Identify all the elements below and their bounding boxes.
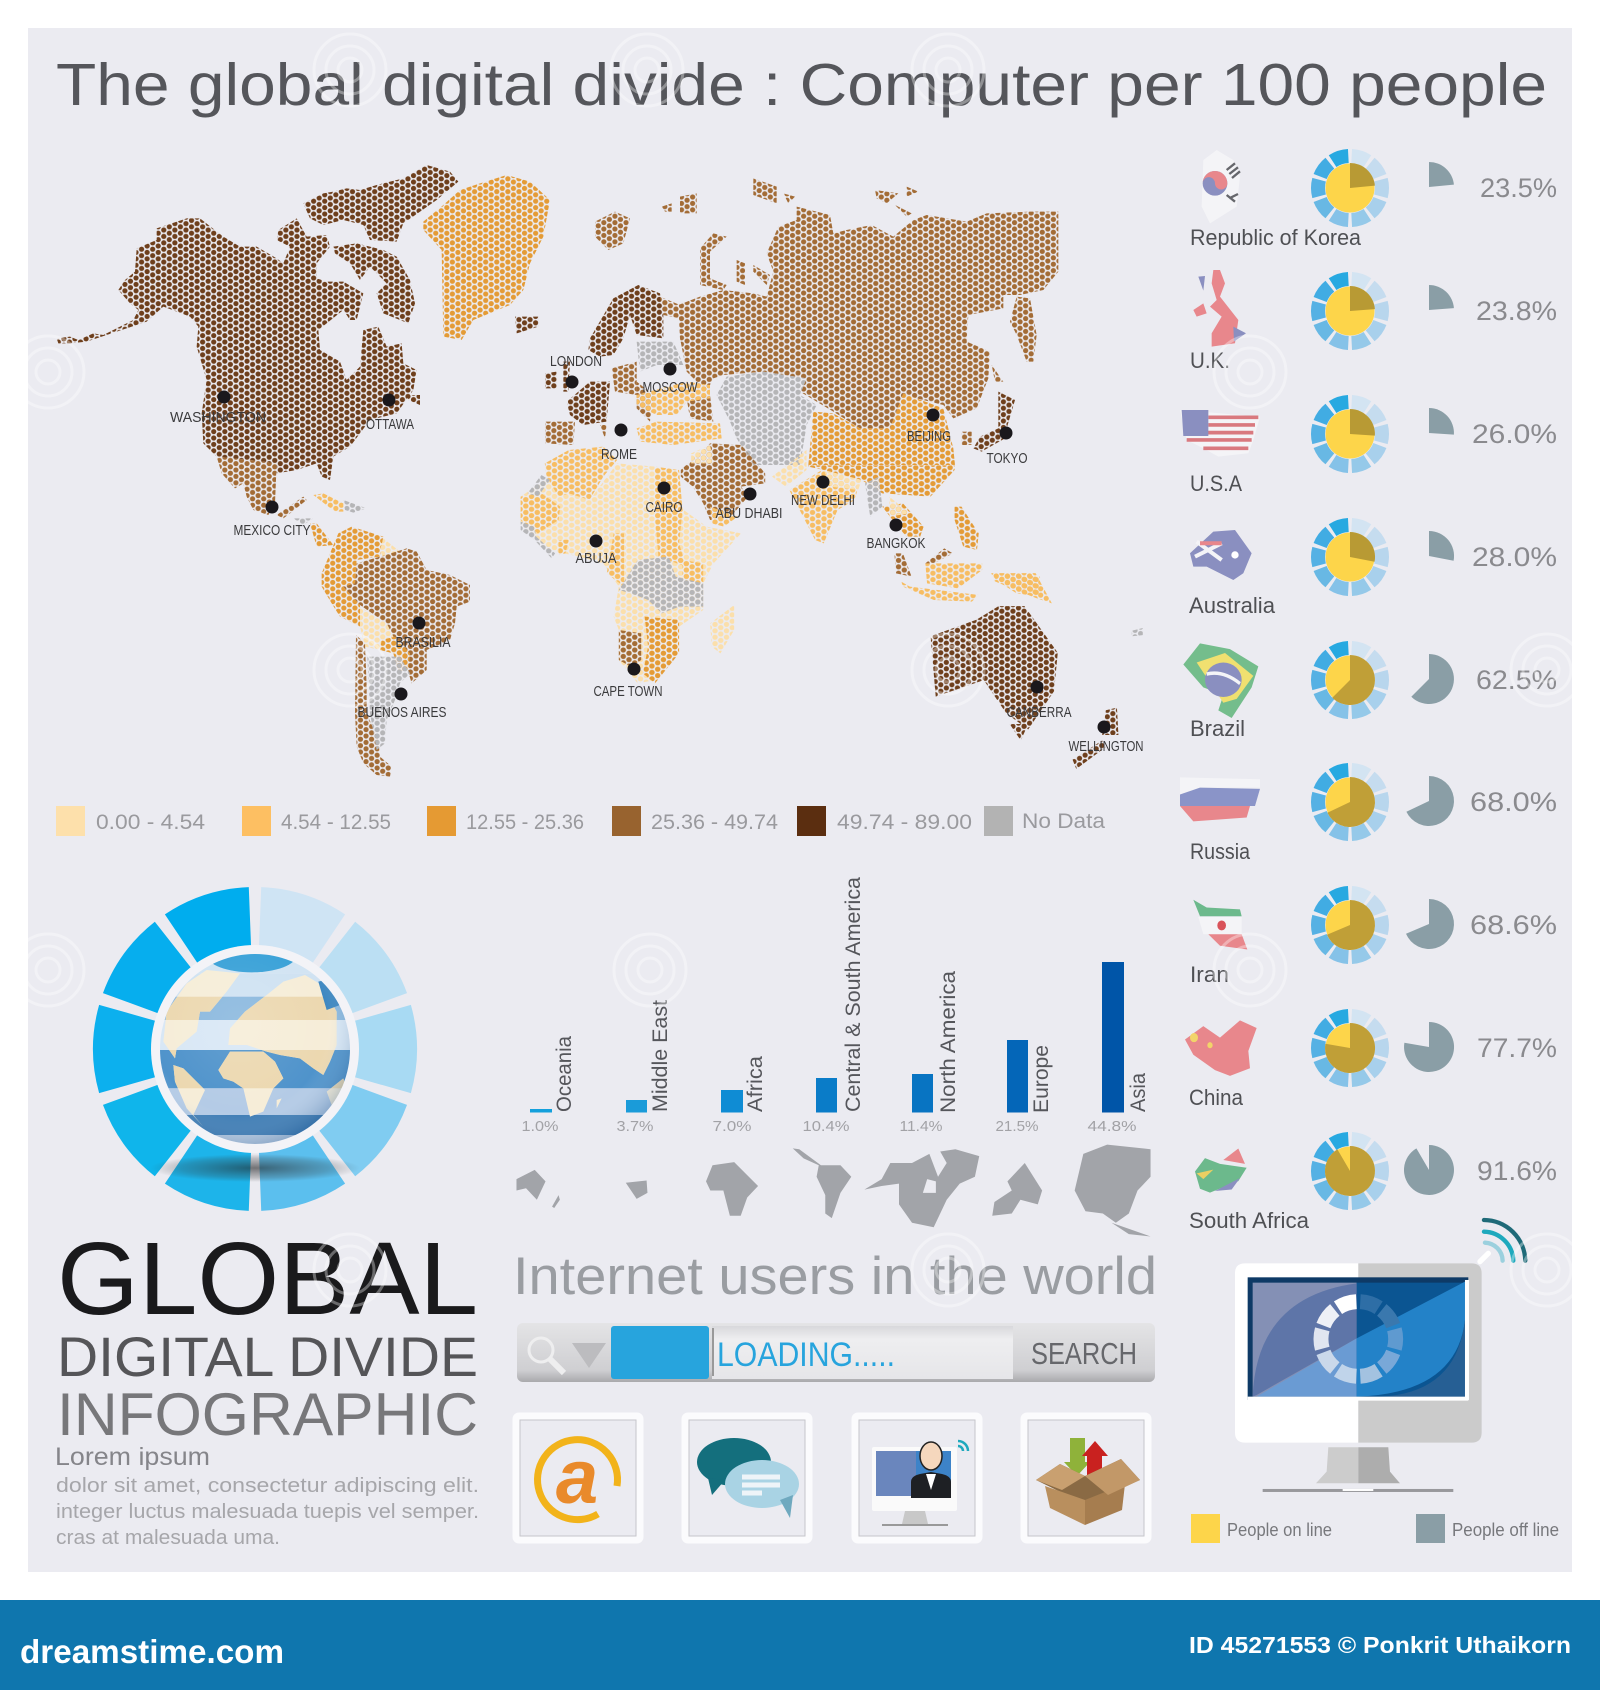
map legend: 0.00 - 4.54 (96, 811, 205, 834)
bar chart: internet users by region: Africa (744, 1056, 767, 1112)
country row: China (1185, 1016, 1557, 1110)
country row: U.S.A: U.S.A (1190, 471, 1242, 496)
country row: U.K.: U.K. (1190, 348, 1230, 373)
country row: Iran: Iran (1190, 962, 1229, 987)
country row: Russia: Russia (1190, 839, 1251, 864)
map legend (56, 806, 1105, 836)
city markers and labels: BEIJING (907, 428, 951, 445)
country row: Australia: Australia (1189, 593, 1276, 618)
North America, Greenland and Iceland (57, 165, 550, 547)
bar chart: internet users by region: 44.8% (1088, 1118, 1136, 1135)
title: The global digital divide : Computer per 100 people (56, 52, 1547, 118)
footer band: ID 45271553 © Ponkrit Uthaikorn (1189, 1632, 1571, 1658)
bar chart: internet users by region: 11.4% (900, 1118, 942, 1135)
country row: U.S.A (1180, 402, 1557, 496)
Australia, New Zealand and eastern islands (931, 573, 1143, 769)
Eurasia north (545, 178, 1058, 465)
city markers and labels: MOSCOW (642, 379, 698, 396)
bar chart: internet users by region (522, 877, 1150, 1135)
donut ring (123, 917, 387, 1181)
country row: Australia: 28.0% (1472, 542, 1557, 572)
GLOBAL heading block (57, 1221, 478, 1448)
bar chart: internet users by region: Oceania (553, 1036, 576, 1112)
search bar (517, 1323, 1155, 1382)
icon tile: email: a (556, 1435, 598, 1520)
city markers and labels: ABUJA (576, 550, 616, 567)
Scandinavia and western Europe (588, 285, 663, 357)
large computer monitor (1235, 1220, 1525, 1492)
city markers and labels: CAIRO (646, 499, 682, 516)
heading: internet users: Internet users in the world (513, 1247, 1157, 1306)
search bar: SEARCH (1031, 1336, 1137, 1371)
icon tile: email (516, 1416, 640, 1540)
lorem ipsum text block: cras at malesuada uma. (56, 1527, 280, 1549)
country row: Russia: 68.0% (1470, 787, 1557, 817)
South America (322, 527, 470, 777)
map legend: No Data (1022, 810, 1105, 833)
map legend: 49.74 - 89.00 (837, 811, 972, 834)
lorem ipsum text block (55, 1443, 479, 1549)
city markers and labels: BANGKOK (866, 535, 926, 552)
Africa, Middle East and southern Asia (521, 443, 1040, 683)
country row: Iran (1190, 893, 1557, 987)
country row: U.K. (1190, 270, 1557, 373)
city markers and labels: WELLINGTON (1068, 738, 1144, 755)
city markers and labels: TOKYO (986, 450, 1028, 467)
country row: Republic of Korea: 23.5% (1480, 173, 1557, 203)
wifi signal (1480, 1220, 1525, 1262)
icon tile: cardboard box (1024, 1416, 1148, 1540)
globe (160, 954, 350, 1144)
country row: U.K.: 23.8% (1476, 296, 1557, 326)
city markers and labels: WASHINGTON (170, 409, 266, 426)
country row: Republic of Korea (1190, 150, 1557, 250)
country row: South Africa (1189, 1139, 1557, 1233)
bar chart: internet users by region: 7.0% (712, 1118, 752, 1135)
icon tile: video call (855, 1416, 979, 1540)
country row: Australia (1189, 525, 1557, 618)
country row: Brazil: 62.5% (1476, 665, 1557, 695)
screen ring (1321, 1302, 1396, 1376)
magnifier icon (529, 1338, 564, 1373)
dotted world map (57, 165, 1143, 777)
bar chart: internet users by region: 3.7% (616, 1118, 654, 1135)
city markers and labels (170, 353, 1144, 755)
city markers and labels: BRASILIA (396, 634, 450, 651)
bar chart: internet users by region: North America (937, 971, 960, 1113)
GLOBAL heading block: DIGITAL DIVIDE (57, 1325, 478, 1388)
map legend: 25.36 - 49.74 (651, 811, 778, 834)
dropdown arrow (572, 1343, 606, 1368)
country row: Russia (1180, 770, 1557, 864)
footer band (0, 1600, 1600, 1690)
bar chart: internet users by region: 10.4% (802, 1118, 850, 1135)
city markers and labels: ABU DHABI (716, 505, 782, 522)
city markers and labels: OTTAWA (366, 416, 414, 433)
GLOBAL heading block: GLOBAL (57, 1221, 478, 1336)
country row: South Africa: 91.6% (1477, 1156, 1557, 1186)
legend: people on line / off line: People on line (1227, 1520, 1332, 1540)
search bar: LOADING..... (717, 1336, 895, 1374)
bar chart: internet users by region: Europe (1030, 1045, 1053, 1113)
legend: people on line / off line (1191, 1514, 1559, 1543)
lorem ipsum text block: Lorem ipsum (55, 1443, 210, 1471)
icon tile: chat bubbles (685, 1416, 809, 1540)
map legend: 12.55 - 25.36 (466, 811, 584, 834)
footer band: dreamstime.com (20, 1633, 284, 1670)
city markers and labels: MEXICO CITY (234, 522, 310, 539)
legend: people on line / off line: People off line (1452, 1520, 1559, 1540)
country row: Republic of Korea: Republic of Korea (1190, 225, 1362, 250)
city markers and labels: CANBERRA (1006, 704, 1072, 721)
city markers and labels: BUENOS AIRES (358, 704, 446, 721)
bar chart: internet users by region: Middle East (649, 1000, 672, 1112)
city markers and labels: ROME (601, 446, 637, 463)
map legend: 4.54 - 12.55 (281, 811, 391, 834)
city markers and labels: CAPE TOWN (594, 683, 662, 700)
lorem ipsum text block: dolor sit amet, consectetur adipiscing elit. (56, 1475, 479, 1497)
grey region silhouettes (516, 1145, 1151, 1236)
bar chart: internet users by region: Central & South America (842, 877, 865, 1112)
country row: China: 77.7% (1477, 1033, 1557, 1063)
country row: China: China (1189, 1085, 1244, 1110)
GLOBAL heading block: INFOGRAPHIC (57, 1381, 478, 1448)
bar chart: internet users by region: 21.5% (996, 1118, 1038, 1135)
city markers and labels: NEW DELHI (791, 492, 855, 509)
country row: U.S.A: 26.0% (1472, 419, 1557, 449)
country row: Brazil (1183, 643, 1557, 741)
shadow under globe (150, 1154, 360, 1182)
country row: Iran: 68.6% (1470, 910, 1557, 940)
city markers and labels: LONDON (550, 353, 602, 370)
large donut with globe (123, 917, 387, 1182)
bar chart: internet users by region: Asia (1127, 1073, 1150, 1112)
lorem ipsum text block: integer luctus malesuada tuepis vel semper. (56, 1501, 479, 1523)
bar chart: internet users by region: 1.0% (522, 1118, 558, 1135)
country row: Brazil: Brazil (1190, 716, 1245, 741)
country row: South Africa: South Africa (1189, 1208, 1310, 1233)
